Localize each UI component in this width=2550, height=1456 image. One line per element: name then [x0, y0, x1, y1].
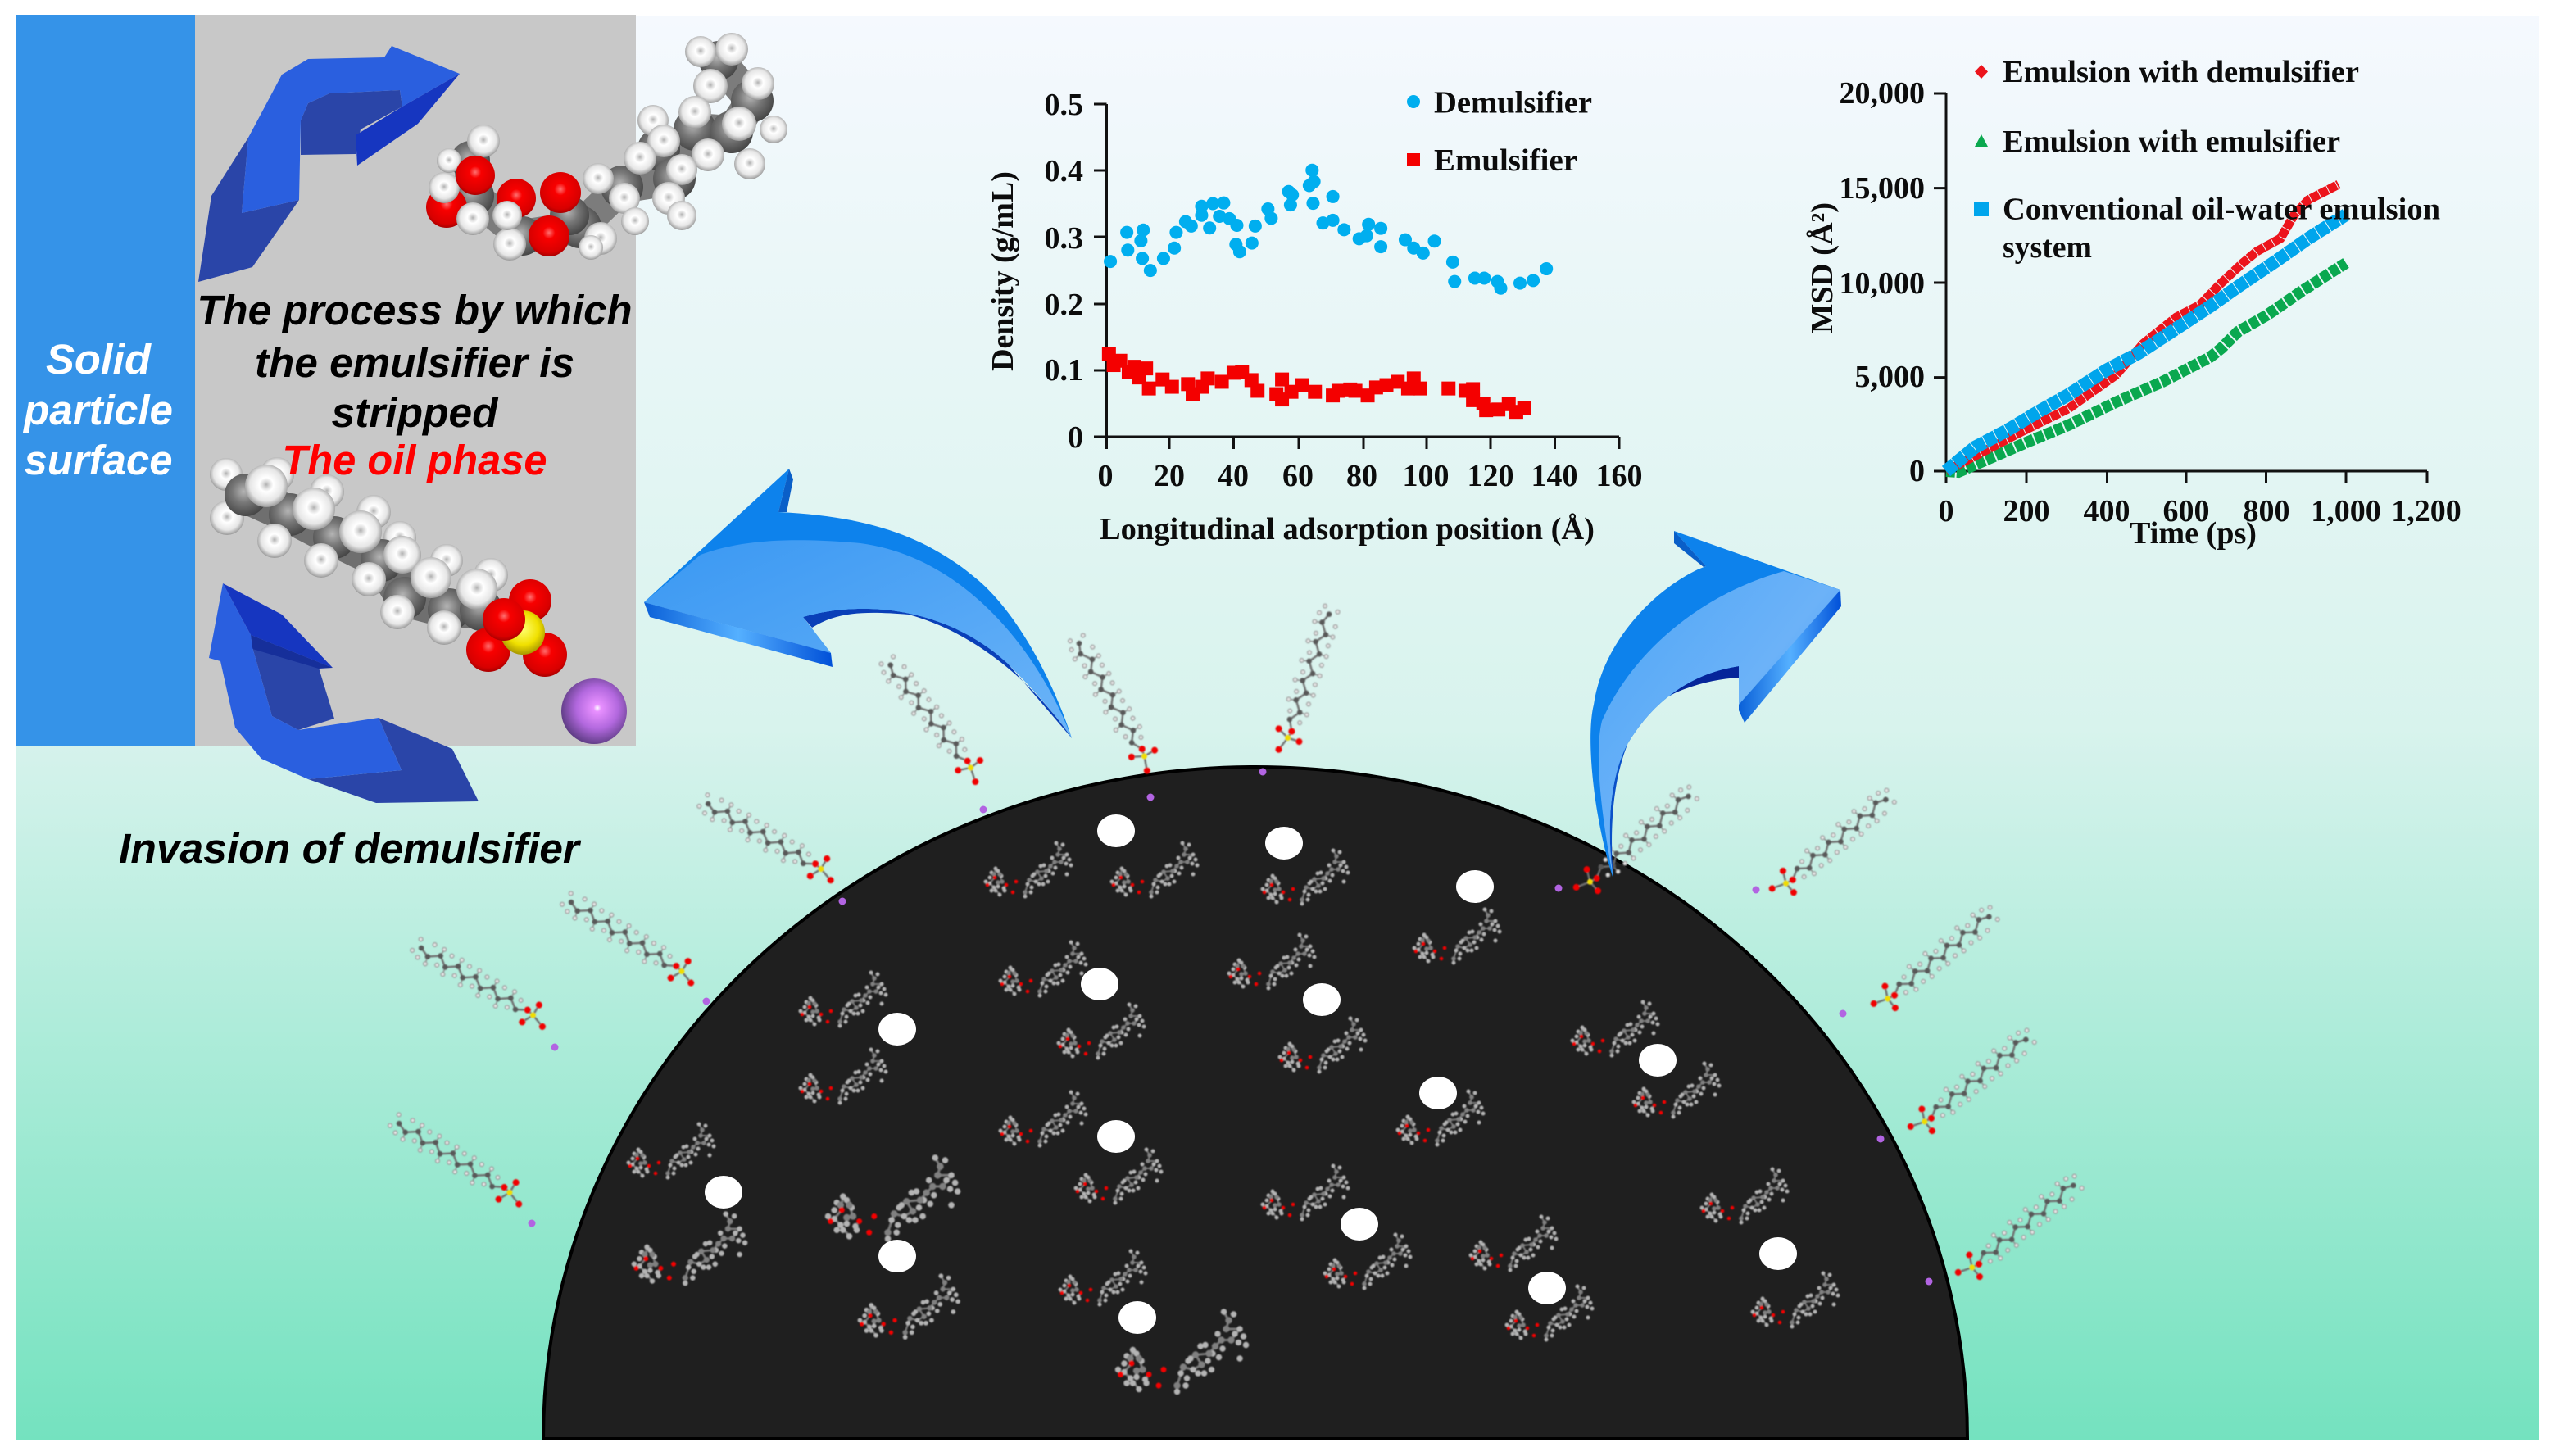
panel: solid particle surface: surface [25, 437, 172, 483]
density chart x axis title: Longitudinal adsorption position (Å) [1100, 512, 1595, 547]
density chart x tick labels: 120 [1467, 459, 1514, 493]
MSD chart x tick labels: 600 [2163, 494, 2209, 528]
process heading: The process by which [197, 287, 633, 333]
density chart y tick labels: 0 [1068, 420, 1083, 455]
density chart y tick labels: 0.2 [1044, 288, 1083, 322]
density chart y tick labels [1044, 88, 1083, 455]
density chart y tick labels: 0.1 [1044, 353, 1083, 388]
density chart x tick labels [1098, 459, 1642, 493]
sodium ions around the particle [532, 772, 1929, 1281]
MSD chart y tick labels: 20,000 [1839, 76, 1925, 111]
panel: solid particle surface: particle [22, 387, 173, 433]
MSD chart y tick labels: 15,000 [1839, 171, 1925, 206]
density chart y tick labels: 0.5 [1044, 88, 1083, 122]
MSD chart x tick labels: 800 [2244, 494, 2289, 528]
label: invasion of demulsifier: Invasion of demulsifier [119, 825, 582, 872]
icon: bottom dark blue 3D arrow [209, 583, 479, 803]
density chart x tick labels: 0 [1098, 459, 1113, 493]
MSD chart y tick labels: 0 [1909, 454, 1925, 488]
emulsifier data points [1102, 347, 1531, 419]
MSD chart x tick labels: 1,200 [2391, 494, 2462, 528]
MSD chart legend: Conventional oil-water emulsion [2003, 192, 2440, 226]
process heading [197, 287, 633, 436]
MSD chart y axis title: MSD (Å²) [1805, 202, 1840, 333]
solid particle hemisphere [543, 767, 1967, 1439]
sodium ion [561, 678, 627, 744]
density chart x tick labels: 160 [1596, 459, 1642, 493]
MSD chart legend: Emulsion with demulsifier [2003, 55, 2359, 89]
MSD chart x tick labels: 200 [2003, 494, 2050, 528]
arrow: large blue curved right [1590, 531, 1841, 879]
density scatter chart [986, 85, 1642, 547]
density chart x tick labels: 80 [1346, 459, 1377, 493]
density chart x tick labels: 100 [1403, 459, 1449, 493]
MSD chart x axis title: Time (ps) [2130, 516, 2257, 551]
MSD chart y tick labels [1839, 76, 1925, 488]
MSD chart x tick labels [1939, 494, 2462, 528]
MSD chart y tick labels: 10,000 [1839, 266, 1925, 301]
label: the oil phase: The oil phase [282, 437, 547, 483]
emulsifier chains around the particle [388, 605, 2086, 1286]
MSD chart x tick labels: 0 [1939, 494, 1953, 528]
process heading: the emulsifier is [255, 339, 574, 386]
density chart x tick labels: 20 [1154, 459, 1185, 493]
MSD chart x tick labels: 1,000 [2311, 494, 2381, 528]
MSD line chart [1805, 55, 2462, 551]
density chart x tick labels: 40 [1218, 459, 1249, 493]
emulsifier space-filling molecule [210, 457, 567, 677]
white droplets [705, 814, 1797, 1334]
MSD chart y tick labels: 5,000 [1855, 360, 1925, 394]
MSD chart legend: Emulsion with emulsifier [2003, 125, 2340, 159]
density chart y tick labels: 0.3 [1044, 221, 1083, 256]
process heading: stripped [331, 389, 499, 436]
panel: solid particle surface: Solid [46, 336, 152, 383]
density chart x tick labels: 60 [1282, 459, 1314, 493]
density chart legend [1407, 85, 1592, 178]
demulsifier data points [1104, 164, 1553, 295]
icon: top dark blue 3D arrow [198, 46, 460, 282]
MSD chart axes [1934, 93, 2427, 483]
MSD chart x tick labels: 400 [2083, 494, 2130, 528]
density chart y tick labels: 0.4 [1044, 154, 1083, 188]
density chart x tick labels: 140 [1531, 459, 1578, 493]
density chart y axis title: Density (g/mL) [986, 171, 1020, 371]
density chart legend: Emulsifier [1434, 143, 1577, 178]
demulsifier space-filling molecule [426, 33, 787, 261]
panel: solid particle surface [16, 15, 195, 746]
density chart legend: Demulsifier [1434, 85, 1592, 120]
MSD chart legend [1974, 55, 2440, 265]
series: emulsion with emulsifier [1946, 263, 2346, 472]
demulsifier molecules inside the particle [628, 843, 1838, 1391]
series: emulsion with demulsifier [1946, 184, 2339, 471]
density chart axes [1094, 104, 1619, 449]
MSD chart legend: system [2003, 230, 2092, 265]
arrow: large blue curved left [644, 469, 1072, 738]
series: conventional oil-water emulsion system [1946, 215, 2346, 471]
panel: grey process background [195, 15, 636, 746]
